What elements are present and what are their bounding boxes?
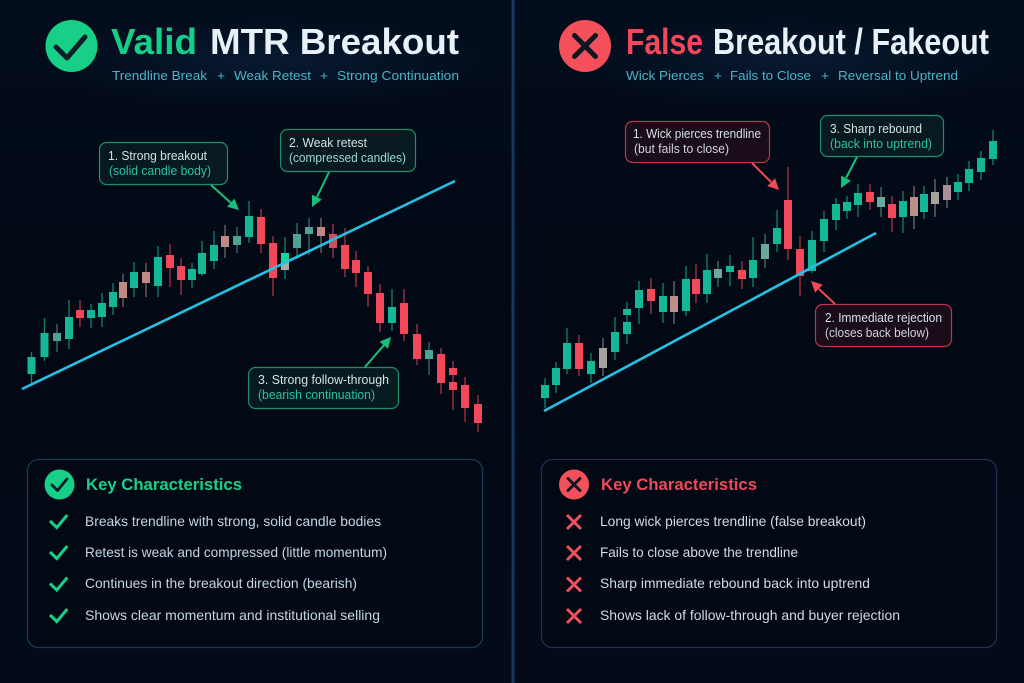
checklist: Shows clear momentum and institutional selling — [85, 607, 380, 623]
icon: red cross badge — [559, 20, 611, 72]
panel: valid key characteristics — [28, 460, 482, 648]
icon: cross badge — [559, 470, 589, 500]
checklist: Retest is weak and compressed (little momentum) — [85, 544, 387, 560]
subtitle: valid formula: Trendline Break — [112, 68, 208, 83]
subtitle: valid formula: Strong Continuation — [337, 68, 459, 83]
callout: wick pierces — [626, 122, 770, 162]
arrow: to long wick — [752, 163, 779, 190]
subtitle: false formula: + — [714, 68, 722, 83]
title: Valid MTR Breakout: Valid — [111, 21, 197, 62]
callout: sharp rebound — [820, 116, 944, 156]
subtitle: false formula: + — [821, 68, 829, 83]
cross list: Fails to close above the trendline — [600, 544, 798, 560]
callout: immediate rejection: 2. Immediate rejection — [825, 311, 942, 325]
callout: sharp rebound: (back into uptrend) — [830, 137, 932, 151]
callout: sharp rebound: 3. Sharp rebound — [830, 122, 922, 136]
subtitle: false formula: Fails to Close — [730, 68, 811, 83]
arrow: to continuation candles — [365, 337, 391, 367]
trendline — [544, 233, 876, 411]
arrow: to retest candles — [312, 172, 329, 207]
callout: strong breakout: 1. Strong breakout — [108, 149, 207, 163]
callout: wick pierces: (but fails to close) — [634, 142, 729, 156]
cross list: Long wick pierces trendline (false breakout) — [600, 513, 866, 529]
subtitle: false formula: Wick Pierces — [626, 68, 705, 83]
callout: strong breakout — [100, 142, 228, 184]
subtitle: false formula — [626, 68, 958, 83]
callout: strong breakout: (solid candle body) — [109, 164, 211, 178]
arrow: to rebound candles — [841, 157, 857, 188]
cross list: Sharp immediate rebound back into uptrend — [600, 575, 870, 591]
heading: Key Characteristics — [601, 476, 757, 494]
panel: valid MTR breakout — [22, 20, 482, 648]
arrow: to rejection candle — [811, 281, 835, 304]
panel: false key characteristics — [542, 460, 996, 648]
checklist: Continues in the breakout direction (bearish) — [85, 575, 357, 591]
cross list — [567, 513, 900, 623]
subtitle: valid formula — [112, 68, 459, 83]
panel: false breakout — [542, 20, 996, 648]
callout: weak retest: 2. Weak retest — [289, 136, 368, 150]
icon: green check badge — [46, 20, 98, 72]
heading: Key Characteristics — [86, 476, 242, 494]
callout: weak retest: (compressed candles) — [289, 151, 406, 165]
callout: wick pierces: 1. Wick pierces trendline — [633, 127, 761, 141]
arrow: to breakout candle — [211, 185, 239, 210]
trendline — [22, 181, 455, 389]
candlestick chart: bearish breakout — [22, 181, 478, 432]
subtitle: valid formula: + — [217, 68, 225, 83]
checklist — [50, 513, 387, 623]
icon: check badge — [44, 470, 74, 500]
callout: immediate rejection — [816, 304, 952, 346]
cross list: Shows lack of follow-through and buyer rejection — [600, 607, 900, 623]
callout: strong follow-through: 3. Strong follow-through — [258, 373, 389, 387]
callout: weak retest — [280, 130, 416, 172]
callout: strong follow-through: (bearish continuation) — [258, 388, 375, 402]
title: False Breakout / Fakeout: False — [626, 21, 703, 62]
callout: immediate rejection: (closes back below) — [825, 326, 929, 340]
callout: strong follow-through — [248, 368, 398, 408]
title: Valid MTR Breakout: MTR Breakout — [210, 21, 459, 62]
subtitle: valid formula: Weak Retest — [234, 68, 311, 83]
title: False Breakout / Fakeout — [626, 21, 989, 62]
candlestick chart: failed breakout — [544, 130, 993, 411]
subtitle: false formula: Reversal to Uptrend — [838, 68, 958, 83]
subtitle: valid formula: + — [320, 68, 328, 83]
checklist: Breaks trendline with strong, solid candle bodies — [85, 513, 381, 529]
